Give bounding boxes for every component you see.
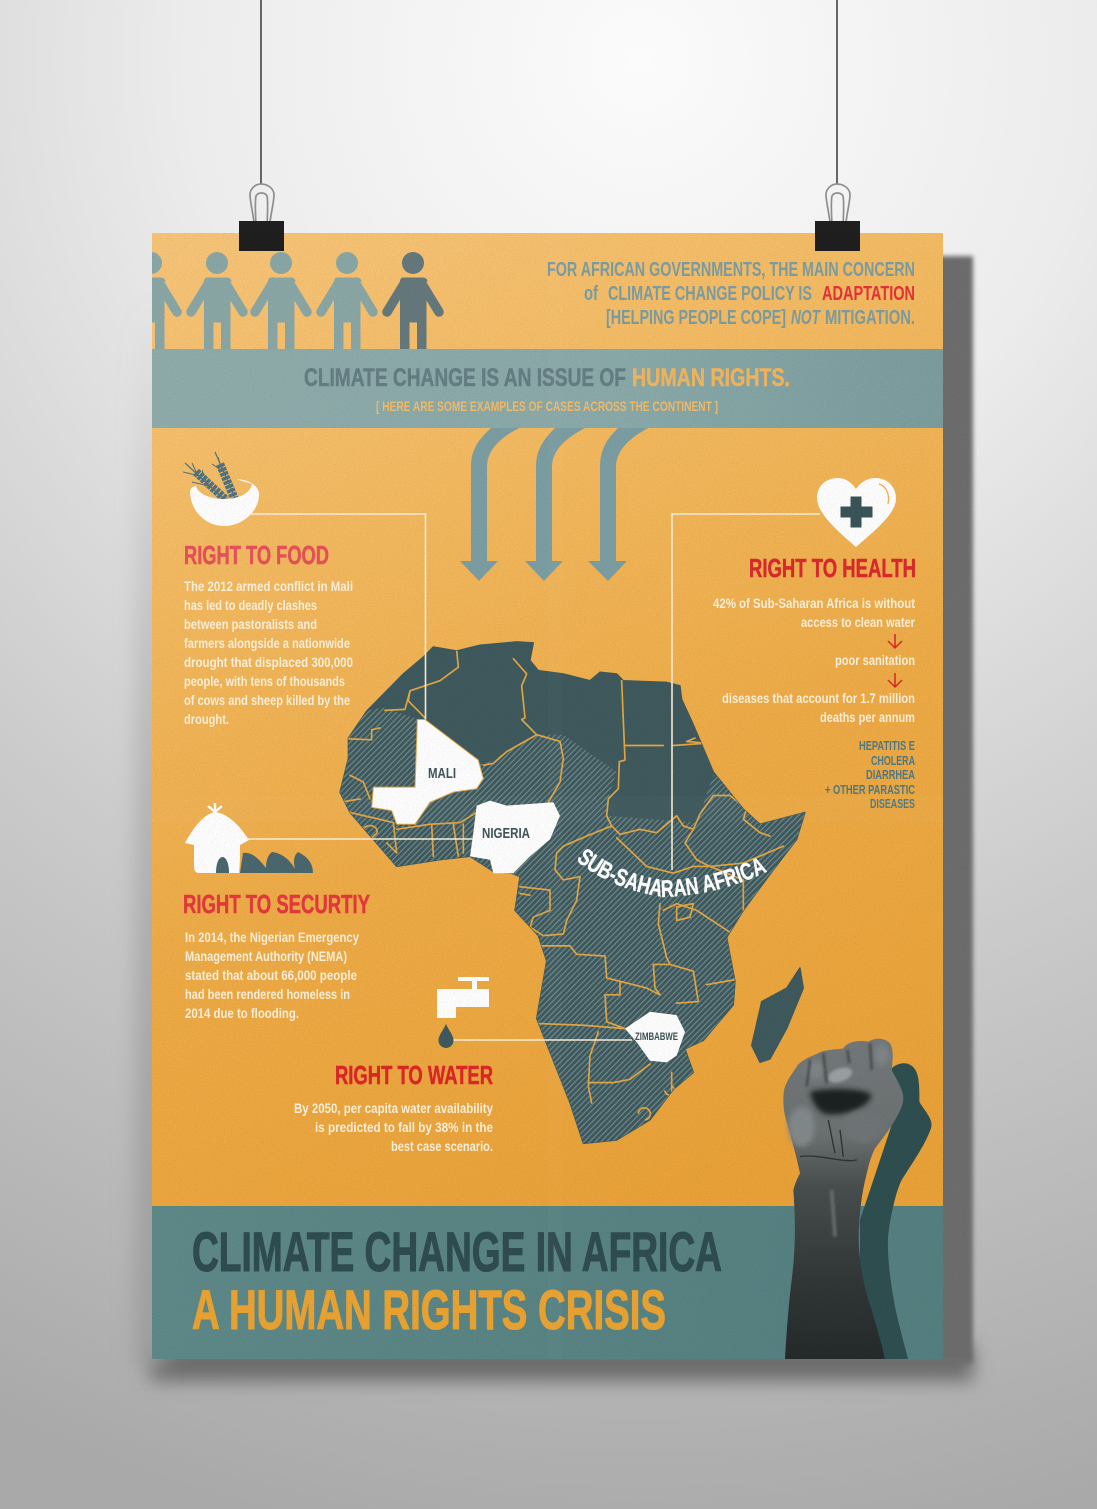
heading: right to food: RIGHT TO FOOD: [184, 540, 329, 570]
banner: main title: [152, 1206, 943, 1359]
disease list: [825, 739, 915, 811]
poster paper: [152, 233, 943, 1206]
text: right to food: people, with tens of thousands: [184, 673, 345, 689]
disease list: CHOLERA: [871, 754, 915, 768]
connector lines: [247, 514, 820, 1040]
fist shading: [788, 1043, 889, 1237]
icon: heart with cross: [817, 478, 896, 547]
binder clip right: [815, 184, 860, 251]
top statement: MITIGATION.: [825, 307, 915, 329]
disease list: DIARRHEA: [866, 768, 915, 782]
fist and forearm: [783, 1039, 903, 1360]
disease list: DISEASES: [870, 797, 915, 811]
three curved arrows: [460, 428, 648, 581]
fist shadow: [860, 1063, 931, 1360]
top statement: CLIMATE CHANGE POLICY IS: [608, 283, 812, 305]
text: right to food: between pastoralists and: [184, 616, 317, 632]
Sub-Saharan hatching: [340, 708, 804, 1144]
country labels: NIGERIA: [482, 826, 530, 842]
Madagascar: [752, 968, 803, 1062]
text: right to food: farmers alongside a nationwide: [184, 635, 350, 651]
Nigeria: [470, 801, 560, 873]
country labels: MALI: [428, 766, 456, 782]
text: right to health: access to clean water: [801, 614, 915, 630]
label: Sub-Saharan Africa: SUB-SAHARAN AFRICA: [578, 849, 768, 898]
text: right to food: has led to deadly clashes: [184, 597, 317, 613]
highlighted countries: [372, 720, 685, 1062]
banner: main title: A HUMAN RIGHTS CRISIS: [192, 1278, 666, 1341]
banner: main title: CLIMATE CHANGE IN AFRICA: [192, 1220, 722, 1283]
map of Africa: [339, 641, 806, 1144]
raised fist: [783, 1039, 931, 1360]
Mali: [372, 720, 483, 824]
heading: right to security: RIGHT TO SECURTIY: [183, 889, 370, 919]
text: right to food: of cows and sheep killed by the: [184, 692, 350, 708]
text: right to security: In 2014, the Nigerian Emergency: [185, 929, 359, 945]
country labels: ZIMBABWE: [635, 1031, 678, 1043]
top statement: NOT: [791, 307, 821, 329]
paper fold lines: [254, 183, 260, 186]
binder clip left: [239, 184, 284, 251]
banner: human rights: [152, 349, 943, 428]
disease list: HEPATITIS E: [859, 739, 915, 753]
text: right to security: stated that about 66,000 people: [185, 967, 357, 983]
text: right to health: 42% of Sub-Saharan Africa is without: [713, 595, 915, 611]
paper and shadow grain: [152, 233, 973, 1359]
country borders: [340, 650, 783, 1120]
heading: right to water: RIGHT TO WATER: [335, 1060, 493, 1090]
banner: human rights: CLIMATE CHANGE IS AN ISSUE OF: [304, 364, 626, 392]
icon: tap and drop: [437, 977, 489, 1048]
text: right to water: [294, 1103, 493, 1151]
text: right to water: By 2050, per capita water availability: [294, 1100, 493, 1116]
text: right to health: diseases that account for 1.7 million: [722, 690, 915, 706]
top statement: FOR AFRICAN GOVERNMENTS, THE MAIN CONCERN: [547, 259, 915, 281]
text: right to health: [713, 595, 915, 725]
people holding hands: [125, 252, 439, 349]
top statement: ADAPTATION: [822, 283, 915, 305]
text: right to water: best case scenario.: [391, 1138, 493, 1154]
top statement: [HELPING PEOPLE COPE]: [606, 307, 786, 329]
icon: bowl of wheat: [183, 452, 259, 526]
poster drop shadow: [136, 256, 973, 1381]
poster: [152, 233, 943, 1359]
text: right to health: deaths per annum: [820, 709, 915, 725]
top statement: [547, 259, 915, 329]
text: right to food: drought that displaced 300,000: [184, 654, 353, 670]
text: right to water: is predicted to fall by 38% in the: [315, 1119, 493, 1135]
text: right to security: [185, 929, 359, 1021]
banner: human rights: [ HERE ARE SOME EXAMPLES OF CASES ACROSS THE CONTINENT ]: [376, 399, 718, 414]
text: right to health: poor sanitation: [835, 652, 915, 668]
country labels: [428, 766, 678, 1043]
text: right to food: drought.: [184, 711, 229, 727]
banner: human rights: HUMAN RIGHTS.: [632, 364, 790, 392]
hanging strings: [261, 0, 837, 184]
text: right to security: Management Authority (NEMA): [185, 948, 347, 964]
top statement: of: [584, 283, 598, 305]
icon: hut and waves: [185, 803, 313, 873]
text: right to security: 2014 due to flooding.: [185, 1005, 299, 1021]
text: right to food: The 2012 armed conflict in Mali: [184, 578, 353, 594]
text: right to food: [184, 578, 353, 727]
disease list: + OTHER PARASTIC: [825, 783, 915, 797]
Africa silhouette: [340, 642, 805, 1143]
heading: right to health: RIGHT TO HEALTH: [749, 553, 916, 583]
Zimbabwe: [625, 1012, 685, 1062]
text: right to security: had been rendered homeless in: [185, 986, 350, 1002]
red arrows: [888, 634, 902, 687]
